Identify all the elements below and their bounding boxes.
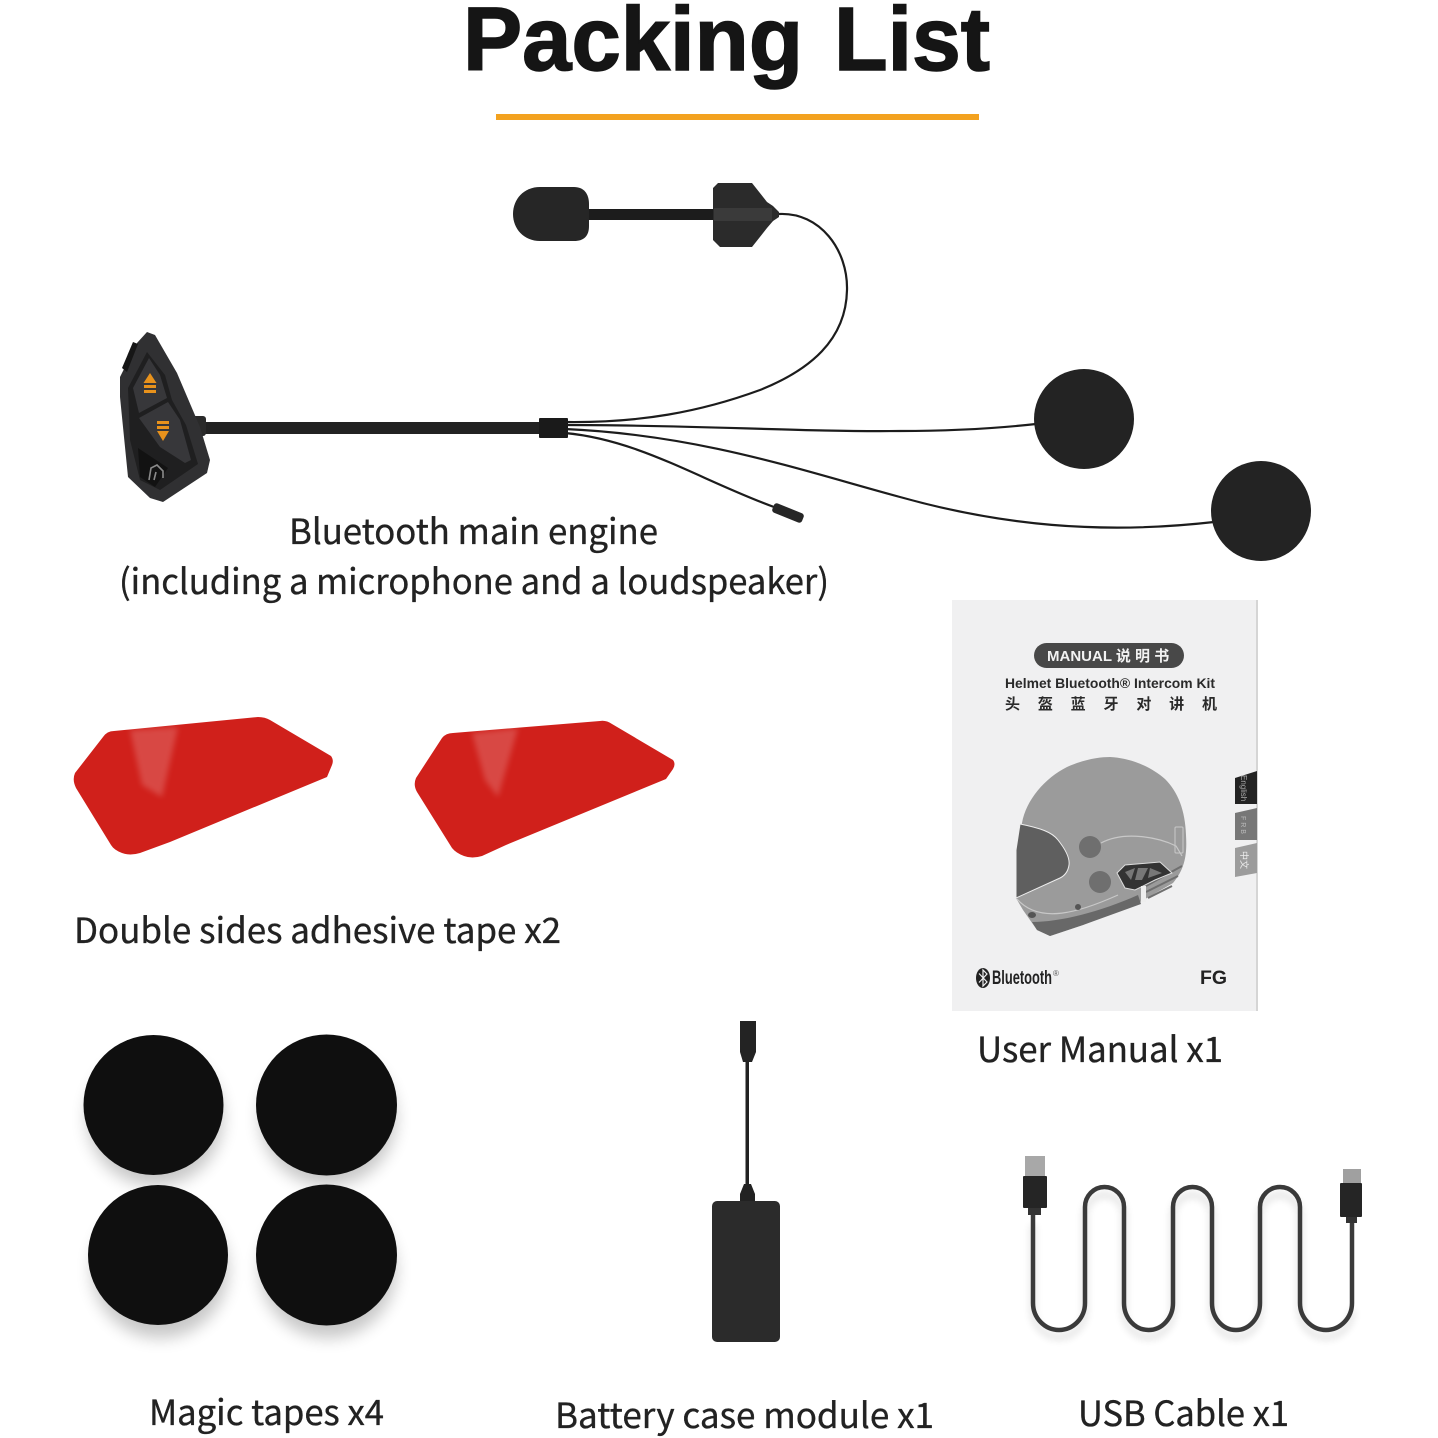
helmet device buttons [1125, 868, 1162, 880]
down arrow icon [157, 421, 169, 441]
product: adhesive tapes [74, 717, 674, 858]
helmet strap [1141, 886, 1146, 902]
microphone clip [713, 183, 779, 247]
label: user manual: User Manual x1 [977, 1022, 1223, 1073]
helmet chin bumps [1028, 904, 1081, 918]
battery cable [746, 1060, 749, 1190]
tape 1 sheen [130, 727, 178, 797]
label: USB cable: USB Cable x1 [1078, 1386, 1289, 1437]
tape 2 sheen [472, 728, 518, 797]
logo mark [149, 465, 163, 480]
battery plug [740, 1021, 756, 1062]
USB-A plug [1023, 1156, 1047, 1215]
cable: short connector [565, 433, 774, 507]
strain relief [192, 416, 206, 436]
helmet rear box [1175, 827, 1183, 853]
speaker 1 [1034, 369, 1134, 469]
product: USB cable [1023, 1156, 1362, 1337]
cable [1033, 1187, 1352, 1330]
speaker 2 [1211, 461, 1311, 561]
label: Bluetooth main engine: Bluetooth main engine [289, 504, 658, 555]
lower button [139, 402, 191, 463]
label: battery case: Battery case module x1 [555, 1388, 934, 1438]
label: magic tapes: Magic tapes x4 [149, 1385, 384, 1436]
manual page [952, 600, 1257, 1011]
tape 2 [415, 721, 674, 858]
tape 1 [74, 717, 333, 854]
upper button [133, 358, 167, 413]
helmet speaker circles [1079, 836, 1111, 893]
tab: Chinese: 中文 [1239, 851, 1250, 869]
helmet visor [1016, 824, 1069, 898]
helmet shell [1016, 757, 1186, 936]
logo button [138, 448, 168, 487]
up arrow icon [144, 373, 156, 393]
cable shadow [1033, 1195, 1352, 1337]
Bluetooth logo [976, 968, 1059, 989]
helmet device [1117, 862, 1172, 890]
product: Bluetooth main engine [120, 183, 1311, 561]
battery strain relief [740, 1184, 755, 1202]
cable: speaker 2 [565, 429, 1214, 528]
Bluetooth logo: ® [1053, 969, 1059, 978]
control unit [120, 332, 210, 502]
helmet wiring [1017, 836, 1182, 914]
manual heading Chinese: 头盔蓝牙对讲机 [1005, 695, 1217, 713]
main boom [195, 422, 541, 434]
helmet neck stripes [1146, 866, 1182, 898]
top-edge port [122, 342, 138, 372]
pad shadows [87, 1050, 396, 1338]
product: magic tapes [84, 1034, 397, 1338]
magic tape pads [84, 1034, 397, 1326]
helmet lower trim [1032, 895, 1141, 936]
inner panel [128, 352, 198, 490]
cable: microphone [565, 214, 847, 422]
tab: English: English [1239, 775, 1248, 801]
cable junction [539, 418, 568, 438]
label: Bluetooth main engine: (including a microphone and a loudspeaker) [119, 554, 829, 605]
cable: speaker 1 [565, 424, 1036, 431]
connector plug [771, 502, 805, 524]
microphone boom [589, 209, 715, 220]
label: adhesive tape: Double sides adhesive tape x2 [74, 903, 561, 954]
USB-C plug [1340, 1169, 1362, 1223]
tab: second language: F R B [1239, 816, 1246, 834]
FG mark: FG [1200, 967, 1227, 989]
microphone foam [513, 187, 589, 241]
product: battery case module [712, 1021, 780, 1342]
label: Bluetooth main engine [119, 504, 829, 605]
microphone [513, 183, 779, 247]
battery box [712, 1201, 780, 1342]
helmet illustration [1016, 757, 1186, 936]
title underline [496, 114, 979, 120]
product: user manual [952, 600, 1258, 1011]
Bluetooth logo: Bluetooth [992, 968, 1052, 989]
manual badge: MANUAL 说 明 书 [1047, 648, 1169, 665]
language tabs [1235, 771, 1257, 877]
manual heading: Helmet Bluetooth® Intercom Kit [1005, 676, 1216, 691]
housing [120, 332, 210, 502]
manual badge [1034, 643, 1184, 668]
